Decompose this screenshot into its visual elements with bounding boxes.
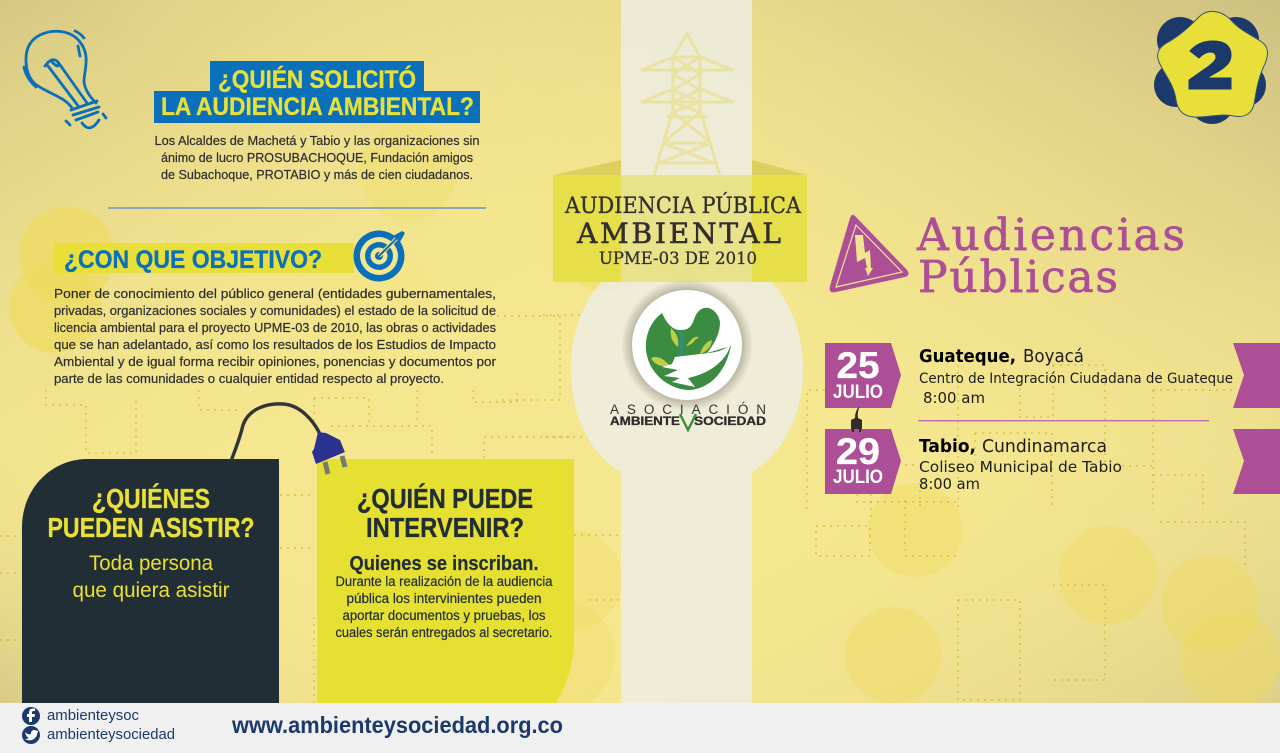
footer xyxy=(0,703,1280,753)
heading: audiencia pública: AUDIENCIA PÚBLICA xyxy=(564,192,802,219)
icon: transmission tower xyxy=(642,34,732,179)
icon: facebook xyxy=(22,707,40,725)
text block: Durante la realización de la audiencia xyxy=(336,574,553,589)
heading xyxy=(357,483,533,543)
date badge: 25 xyxy=(836,345,880,386)
event text: Centro de Integración Ciudadana de Guateque xyxy=(919,371,1233,387)
event text: Boyacá xyxy=(1023,346,1084,367)
logo: asociación ambiente y sociedad: SOCIEDAD xyxy=(694,416,766,428)
logo: asociación ambiente y sociedad xyxy=(610,279,766,430)
text block: Los Alcaldes de Machetá y Tabio y las organizaciones sin xyxy=(154,133,480,148)
event: tabio xyxy=(825,429,1280,494)
heading: INTERVENIR? xyxy=(366,512,524,543)
text block: Toda persona xyxy=(89,552,213,575)
date badge: JULIO xyxy=(833,467,883,488)
event text xyxy=(919,346,1233,407)
heading: LA AUDIENCIA AMBIENTAL? xyxy=(161,93,474,121)
panel: quién solicitó xyxy=(154,61,480,182)
event text: Tabio, xyxy=(919,436,976,457)
event text: Cundinamarca xyxy=(982,436,1107,457)
text block: parte de las comunidades o cualquier entidad respecto al proyecto. xyxy=(54,371,444,386)
icon: small plug xyxy=(851,406,862,432)
date badge: 29 xyxy=(836,431,880,472)
heading: audiencias públicas: Audiencias xyxy=(916,210,1185,261)
badge: number 2 xyxy=(1154,11,1268,124)
event text: Guateque, xyxy=(919,346,1016,367)
text block xyxy=(54,286,497,386)
subheading: Quienes se inscriban. xyxy=(350,553,538,575)
website url: www.ambienteysociedad.org.co xyxy=(231,712,563,738)
ribbon xyxy=(1233,429,1280,494)
logo: asociación ambiente y sociedad: AMBIENTE xyxy=(610,416,680,428)
event text xyxy=(919,436,1122,493)
text block: privadas, organizaciones sociales y comunidades) el estado de la solicitud de xyxy=(54,303,496,318)
event text: 8:00 am xyxy=(919,475,980,493)
date badge: JULIO xyxy=(833,382,883,403)
heading: ¿QUIÉNES xyxy=(92,483,210,514)
panel: con que objetivo xyxy=(54,230,497,386)
text block: aportar documentos y pruebas, los xyxy=(342,608,546,623)
event: guateque xyxy=(825,343,1280,408)
text block: que se han adelantado, así como los resultados de los Estudios de Impacto xyxy=(54,337,496,352)
social: twitter handle: ambienteysociedad xyxy=(47,726,175,743)
date badge xyxy=(825,429,901,494)
logo green shape xyxy=(646,308,731,390)
text block: pública los intervinientes pueden xyxy=(346,591,542,606)
text block xyxy=(72,552,230,602)
heading: ¿CON QUE OBJETIVO? xyxy=(64,246,322,274)
icon: cable and plug xyxy=(231,404,345,474)
text block: Poner de conocimiento del público general (entidades gubernamentales, xyxy=(54,286,496,301)
heading: audiencias públicas: Públicas xyxy=(918,252,1118,303)
heading: upme: UPME-03 DE 2010 xyxy=(599,249,757,269)
center band and circle xyxy=(571,0,803,703)
event text: 8:00 am xyxy=(923,389,985,407)
text block: cuales serán entregados al secretario. xyxy=(336,625,552,640)
icon: target xyxy=(354,230,405,282)
text block: Ambiental y de igual forma recibir opiniones, ponencias y documentos por xyxy=(54,354,497,369)
icon: light bulb xyxy=(24,31,106,128)
date badge xyxy=(825,343,901,408)
text block: de Subachoque, PROTABIO y más de cien ciudadanos. xyxy=(161,167,473,182)
heading: audiencias públicas xyxy=(916,210,1185,303)
panel: quién puede intervenir xyxy=(317,459,574,703)
icon: twitter xyxy=(22,726,40,744)
social: facebook handle: ambienteysoc xyxy=(47,707,139,724)
panel: quiénes pueden asistir xyxy=(22,459,279,703)
heading xyxy=(154,61,480,123)
text block: que quiera asistir xyxy=(72,579,230,602)
title box: audiencia pública ambiental xyxy=(553,160,807,282)
heading: ¿QUIÉN PUEDE xyxy=(357,483,533,514)
heading: ambiental: AMBIENTAL xyxy=(576,217,781,250)
heading: PUEDEN ASISTIR? xyxy=(48,512,254,543)
heading xyxy=(48,483,254,543)
event text: Coliseo Municipal de Tabio xyxy=(919,458,1122,476)
text block: ánimo de lucro PROSUBACHOQUE, Fundación amigos xyxy=(161,150,473,165)
ribbon xyxy=(1233,343,1280,408)
text block xyxy=(336,574,553,640)
icon: electric hazard triangle xyxy=(830,215,909,292)
logo text: ASOCIACIÓN xyxy=(610,402,766,417)
text block xyxy=(154,133,480,182)
heading: ¿QUIÉN SOLICITÓ xyxy=(218,64,416,94)
text block: licencia ambiental para el proyecto UPME-03 de 2010, las obras o actividades xyxy=(54,320,496,335)
